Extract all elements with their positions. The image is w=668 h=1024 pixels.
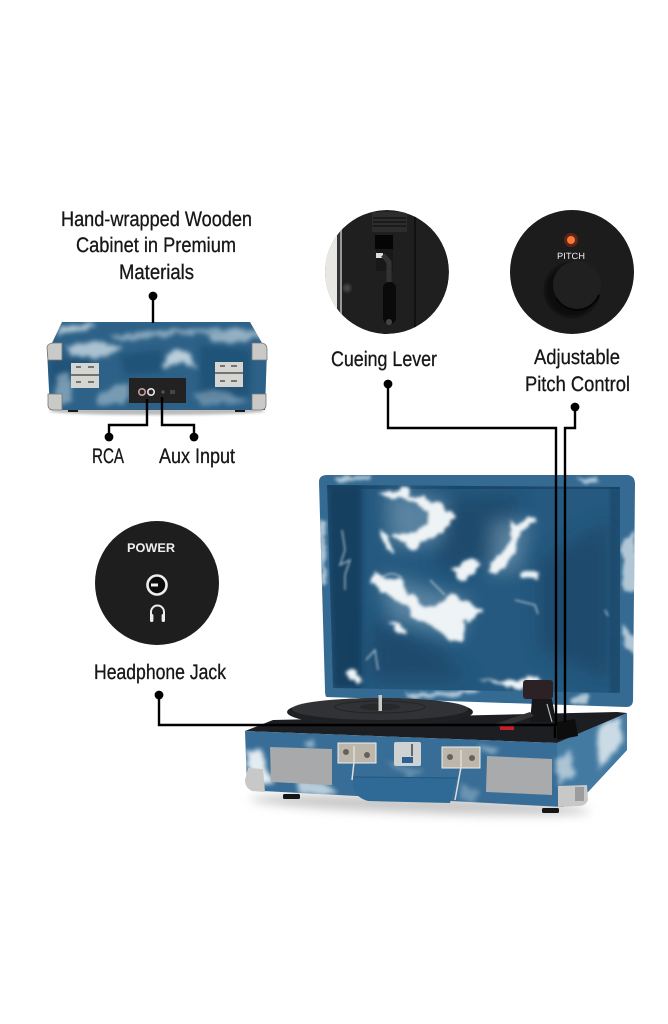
turntable open lid xyxy=(319,475,636,707)
turntable base xyxy=(240,680,635,819)
heading: hand-wrapped cabinet xyxy=(61,208,252,284)
callout: pitch control connector xyxy=(565,403,579,722)
callout: cueing lever connector xyxy=(384,380,556,726)
foot left xyxy=(283,794,300,799)
tie-dye pattern xyxy=(345,487,540,690)
label: adjustable pitch control: Pitch Control xyxy=(525,373,630,396)
label: RCA: RCA xyxy=(92,445,124,468)
speaker right xyxy=(486,756,552,795)
detail circle: headphone jack xyxy=(95,521,219,645)
body tie-dye xyxy=(245,713,627,807)
detail circle: pitch control: PITCH xyxy=(557,251,585,261)
corner protectors xyxy=(47,343,267,410)
latch right xyxy=(442,747,480,800)
foot right xyxy=(542,808,559,813)
center clasp xyxy=(394,742,421,766)
label: Aux Input: Aux Input xyxy=(159,445,235,468)
detail circle: pitch control xyxy=(510,210,634,334)
platter xyxy=(287,695,473,726)
icon: headphones xyxy=(150,606,165,622)
corner protector left xyxy=(245,768,265,792)
pitch knob xyxy=(557,719,578,740)
infographic canvas xyxy=(46,210,635,820)
corner protector right xyxy=(558,785,588,807)
hinge right xyxy=(215,362,243,387)
rear jack panel xyxy=(129,378,186,403)
label: adjustable pitch control xyxy=(525,346,630,396)
detail circle: cueing lever xyxy=(325,210,449,334)
callout: aux connector xyxy=(162,397,198,441)
callout: headphone connector xyxy=(155,691,555,738)
heading: hand-wrapped cabinet: Cabinet in Premium xyxy=(76,234,236,257)
lid inner panel xyxy=(327,485,620,693)
callout: cabinet connector xyxy=(149,292,157,323)
deck xyxy=(245,712,627,743)
label: cueing lever: Cueing Lever xyxy=(331,348,437,371)
tonearm xyxy=(495,680,556,730)
ground shadow xyxy=(250,791,590,819)
callout: RCA connector xyxy=(105,399,147,441)
latch left xyxy=(338,743,376,780)
heading: hand-wrapped cabinet: Materials xyxy=(119,261,194,284)
detail circle: headphone jack: POWER xyxy=(127,541,175,555)
carry handle xyxy=(353,777,457,803)
label: adjustable pitch control: Adjustable xyxy=(534,346,620,369)
rear view of turntable xyxy=(45,320,270,415)
speaker left xyxy=(270,747,332,785)
hinge left xyxy=(71,363,99,388)
label: headphone jack: Headphone Jack xyxy=(94,661,226,684)
heading: hand-wrapped cabinet: Hand-wrapped Wooden xyxy=(61,208,252,231)
